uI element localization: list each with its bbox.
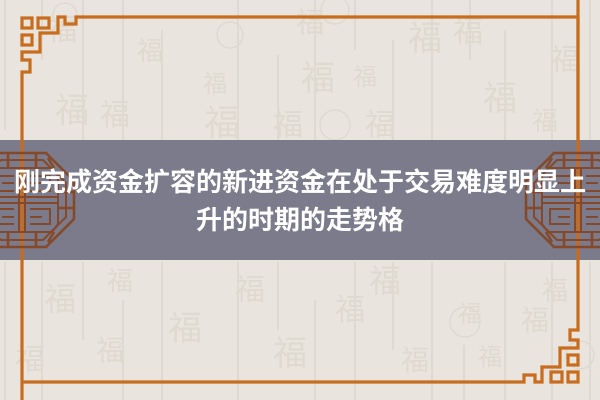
paper background with faint characters: 福 [542,271,568,308]
paper background with faint characters: 福 [204,94,240,146]
paper background with faint characters: 福 [532,101,558,138]
paper background with faint characters: 福 [273,100,303,144]
paper background with faint characters: 福 [483,71,517,120]
paper background with faint characters: 福 [296,1,324,41]
paper background with faint characters: 福 [55,83,89,132]
paper background with faint characters: 福 [15,335,45,379]
paper background with faint characters: 福 [47,5,77,49]
paper background with faint characters: 福 [550,35,580,79]
paper background with faint characters: 福 [273,326,307,375]
paper background with faint characters: 福 [521,299,549,339]
paper background with faint characters: 福 [458,294,482,329]
paper background with faint characters: 福 [369,256,401,302]
paper background with faint characters: 福 [168,301,202,350]
paper background with faint characters: 福 [44,274,76,320]
paper background with faint characters: 福 [301,51,335,100]
title text [14,167,586,235]
paper background with faint characters: 福 [335,285,365,329]
paper background with faint characters: 福 [453,7,483,51]
paper background with faint characters: 福 [96,329,124,369]
paper background with faint characters: 福 [353,57,377,92]
title text: 升的时期的走势格 [196,205,404,235]
paper background with faint characters: 福 [203,64,227,99]
paper background with faint characters: 福 [137,31,163,68]
paper background with faint characters: 福 [401,339,429,379]
paper background with faint characters: 福 [408,11,442,60]
paper background with faint characters: 福 [107,261,133,298]
paper background with faint characters: 福 [100,90,130,134]
title text: 刚完成资金扩容的新进资金在处于交易难度明显上 [14,167,586,197]
paper background with faint characters: 福 [365,100,395,144]
paper background with faint characters: 福 [478,337,502,372]
paper background with faint characters: 福 [235,265,265,309]
